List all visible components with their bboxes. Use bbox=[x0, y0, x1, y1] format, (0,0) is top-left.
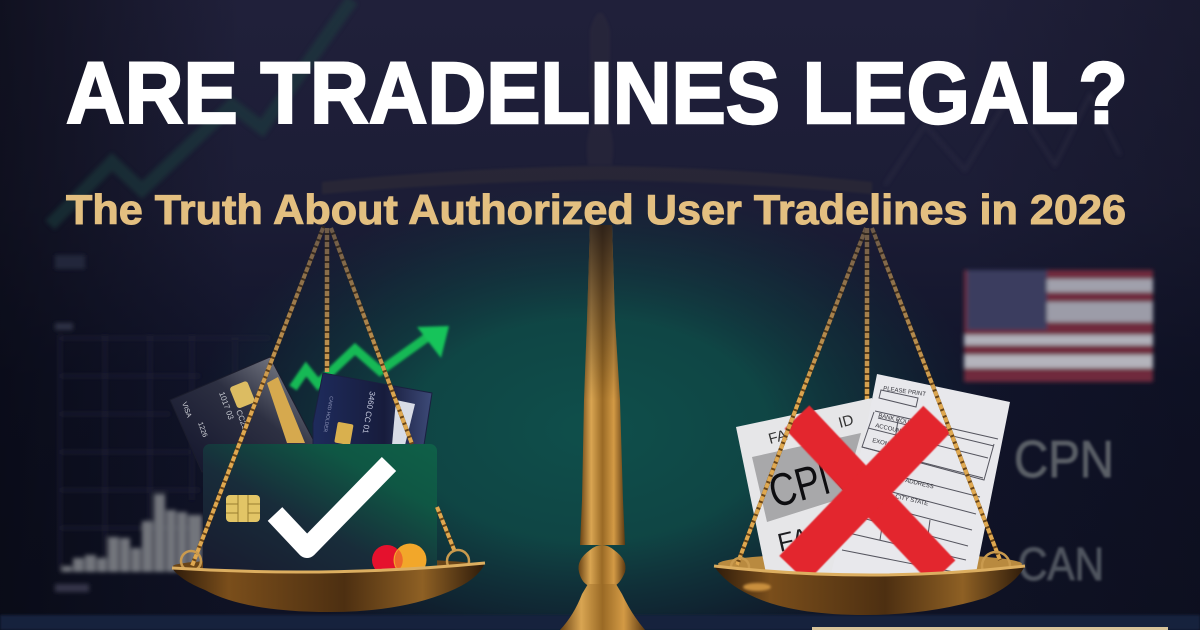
blurred CAN label: CAN bbox=[1018, 538, 1104, 590]
fake form document: PLEASE PRINT bbox=[883, 386, 926, 398]
right pan chains (back) bbox=[800, 228, 867, 400]
blue credit card: CARD HOLDER bbox=[322, 396, 334, 433]
fake ID document: ID bbox=[837, 412, 856, 432]
right pan inner bowl bbox=[718, 553, 1022, 575]
fake form document: ACCOUNT bbox=[875, 423, 905, 436]
black credit card: 1226 bbox=[196, 421, 208, 438]
fake ID document bbox=[736, 398, 880, 578]
fake form document bbox=[830, 374, 1010, 578]
black credit card: CC25 bbox=[234, 409, 250, 431]
bottom right tan strip bbox=[812, 627, 1168, 630]
black credit card: 1017 03 bbox=[217, 391, 236, 421]
left pan inner bowl bbox=[173, 558, 483, 574]
blurred CPN label: CPN bbox=[1014, 431, 1114, 489]
faint chart, top right bbox=[885, 95, 1120, 185]
fake ID document: CPN bbox=[763, 447, 852, 518]
right balance pan bbox=[714, 552, 1025, 615]
blue credit card bbox=[313, 373, 432, 445]
green credit card with check mark bbox=[203, 444, 437, 576]
blue credit card: 3460 CC 01 bbox=[361, 391, 377, 435]
scale: central golden column bbox=[560, 225, 645, 630]
fake form document: CITY STATE bbox=[895, 494, 929, 508]
fake form document: BANK ROUTE bbox=[878, 413, 917, 428]
black credit card: VISA bbox=[180, 401, 192, 419]
right chains front bbox=[737, 228, 1000, 565]
blurred background bar chart bbox=[55, 255, 270, 592]
left balance pan bbox=[172, 550, 485, 612]
green rising arrow bbox=[293, 326, 449, 388]
black credit card bbox=[170, 357, 316, 472]
white check mark bbox=[275, 464, 389, 548]
scale: faint top post and beam bbox=[322, 12, 872, 194]
fake ID document: FAKE bbox=[775, 514, 846, 558]
card chip bbox=[226, 495, 260, 522]
red X mark bbox=[793, 417, 943, 572]
subtitle: The Truth About Authorized User Tradelines in 2026 bbox=[66, 186, 1126, 233]
faint green trend line, top left bbox=[50, 0, 352, 225]
left pan chains bbox=[192, 228, 455, 566]
blurred American flag bbox=[964, 270, 1153, 382]
mastercard logo bbox=[372, 544, 426, 569]
fake ID document: FA bbox=[767, 427, 789, 448]
fake form document: ADDRESS bbox=[905, 478, 934, 490]
title: ARE TRADELINES LEGAL? bbox=[66, 45, 1128, 142]
fake form document: EXON bbox=[872, 438, 889, 448]
